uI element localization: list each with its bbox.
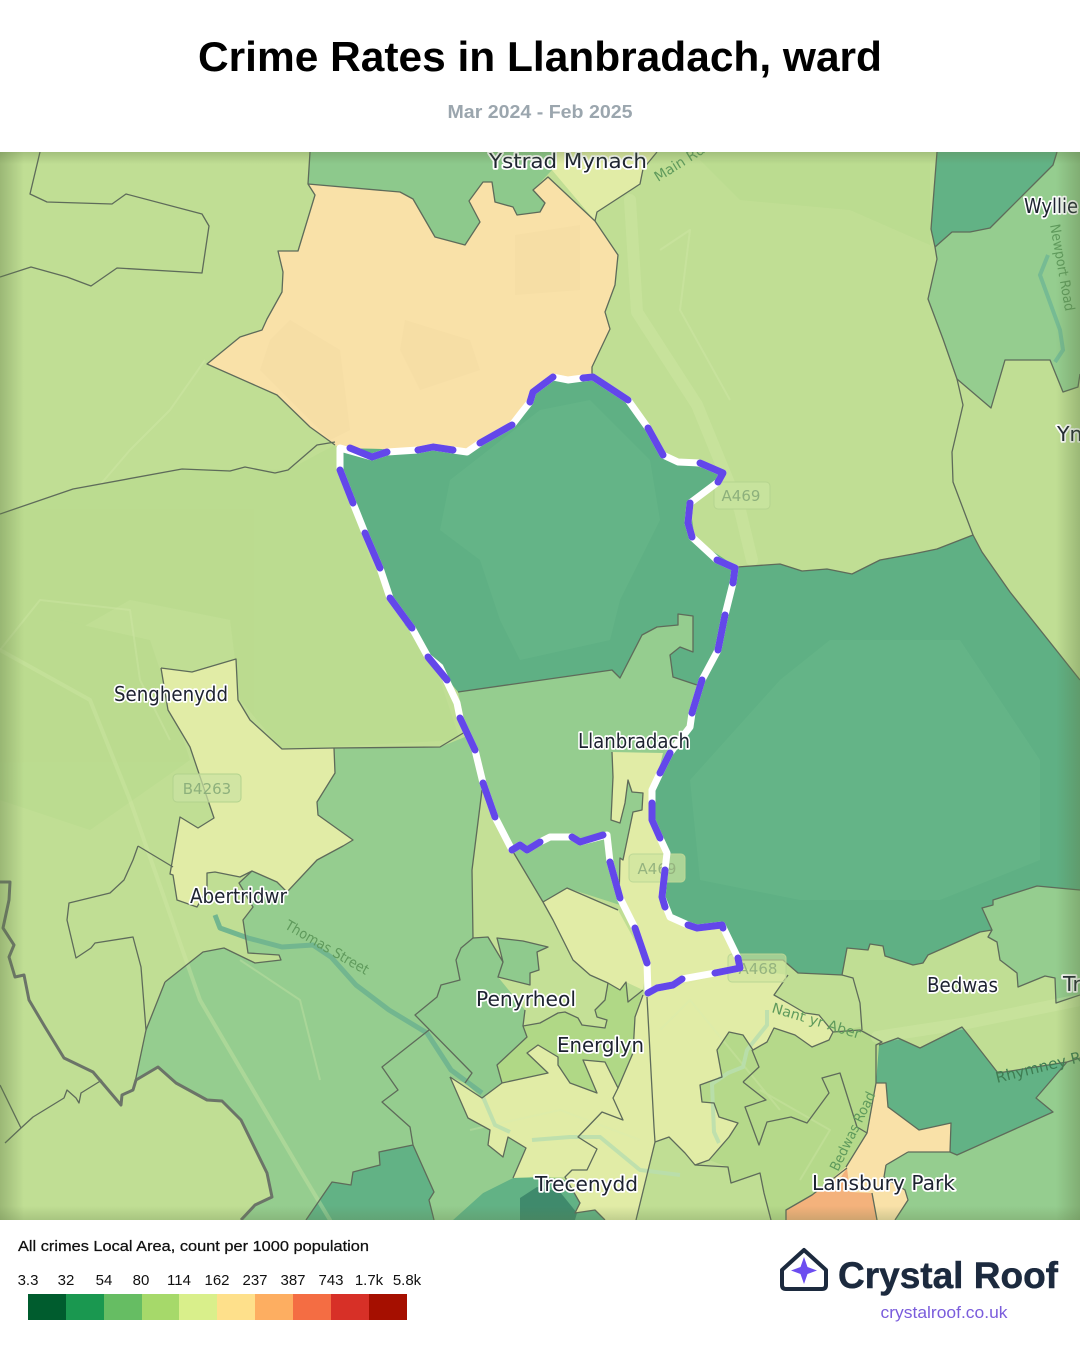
area: beige shading bbox=[260, 225, 580, 440]
place labels bbox=[114, 149, 1080, 1196]
street label: Rhymney River: Rhymney R bbox=[994, 1048, 1080, 1087]
street label: Thomas Street: Thomas Street bbox=[281, 917, 372, 979]
logo wordmark: Crystal Roof bbox=[838, 1255, 1059, 1296]
legend scale values: 162 bbox=[204, 1272, 230, 1289]
legend colour swatches bbox=[28, 1294, 407, 1320]
legend scale values: 32 bbox=[58, 1272, 74, 1289]
map base: light green areas bbox=[0, 152, 1080, 1220]
place labels: Trecenydd bbox=[534, 1172, 638, 1196]
area: Penyrheol upper patch bbox=[497, 938, 548, 985]
area: dark green Bedwas south bbox=[876, 1027, 1067, 1155]
road label: A468 bbox=[728, 954, 786, 982]
legend scale values bbox=[18, 1272, 422, 1289]
road label: B4263 bbox=[173, 774, 241, 802]
street label: Main Road: Main Rd bbox=[652, 142, 708, 185]
river: Trecenydd stream bbox=[483, 1010, 767, 1175]
legend bbox=[18, 1239, 422, 1320]
place labels: Penyrheol bbox=[476, 987, 576, 1011]
road label: A469 south bbox=[629, 854, 685, 882]
place labels: Bedwas bbox=[927, 973, 998, 997]
place labels: Lansbury Park bbox=[812, 1171, 955, 1195]
area: medium green south of river bbox=[382, 1030, 526, 1220]
area: medium green east patch bbox=[982, 886, 1080, 1003]
area: south medium green ward bbox=[512, 835, 620, 905]
area: eastern dark green ward bbox=[652, 535, 1080, 975]
ward boundary lines bbox=[0, 152, 1080, 1220]
legend scale values: 80 bbox=[133, 1272, 149, 1289]
title: Crime Rates in Llanbradach, ward bbox=[198, 33, 882, 80]
area: pale Ystrad Mynach bbox=[552, 152, 657, 221]
legend scale values: 3.3 bbox=[18, 1272, 38, 1289]
choropleth map bbox=[0, 142, 1080, 1220]
place labels: Llanbradach bbox=[578, 729, 690, 753]
legend scale values: 743 bbox=[318, 1272, 344, 1289]
area: terrain shading bbox=[0, 160, 930, 830]
area: Penyrheol medium green bbox=[415, 937, 527, 1098]
area: light green Van district bbox=[700, 1027, 879, 1220]
icon: house with star bbox=[782, 1250, 826, 1289]
area: bottom right medium green bbox=[884, 1058, 1080, 1220]
legend scale values: 114 bbox=[167, 1272, 191, 1289]
area: dark green Trecenydd south bbox=[453, 1177, 605, 1220]
area: north-east medium green ward bbox=[928, 152, 1080, 408]
area: pale yellow Senghenydd bbox=[161, 659, 353, 907]
ward outline: Llanbradach bbox=[340, 377, 740, 993]
dashes over outline bbox=[340, 377, 740, 993]
legend scale values: 237 bbox=[242, 1272, 268, 1289]
roads and streets bbox=[0, 484, 1080, 1220]
legend title: All crimes Local Area, count per 1000 population bbox=[18, 1239, 369, 1255]
legend scale values: 387 bbox=[280, 1272, 306, 1289]
area: central ward medium green bbox=[458, 614, 697, 905]
place labels: Abertridwr bbox=[190, 884, 288, 908]
website link: crystalroof.co.uk bbox=[880, 1304, 1008, 1322]
area: orange Lansbury Park bbox=[786, 1168, 877, 1220]
logo: Crystal Roof bbox=[782, 1250, 1059, 1322]
area: Llanbradach ward dark green upper bbox=[340, 376, 737, 692]
street label: Bedwas Road: Bedwas Road bbox=[827, 1089, 879, 1174]
road label: A469 north bbox=[714, 482, 770, 509]
area: beige northern ward bbox=[207, 177, 618, 452]
legend scale values: 1.7k bbox=[355, 1272, 384, 1289]
place labels: Ystrad Mynach bbox=[488, 149, 647, 173]
road label: A469 south: A469 bbox=[638, 860, 676, 878]
county boundary bbox=[0, 882, 272, 1220]
area: north-east dark green ward bbox=[931, 152, 1057, 247]
area: medium green ward west bbox=[134, 735, 482, 1220]
area: Energlyn light green bbox=[497, 982, 643, 1093]
area: pale yellow south Caerphilly bbox=[647, 968, 833, 1165]
area: pale yellow Trecenydd bbox=[450, 995, 655, 1220]
river: Thomas Street stream bbox=[215, 915, 482, 1093]
street label: Newport Road: Newport Road bbox=[1046, 223, 1077, 312]
map edge vignette bbox=[0, 152, 1080, 1220]
area: pale yellow south-west of ward bbox=[543, 888, 647, 990]
area: beige Lansbury Park bbox=[832, 1084, 950, 1220]
road label: B4263: B4263 bbox=[183, 780, 231, 798]
place labels: Energlyn bbox=[557, 1033, 644, 1057]
area: pale yellow ward core bbox=[611, 752, 740, 995]
street label: Nant yr Aber: Nant yr Aber bbox=[770, 1001, 863, 1043]
road label: A468: A468 bbox=[739, 960, 777, 978]
area: darkest ward bbox=[520, 1187, 577, 1220]
road label: A469 north: A469 bbox=[722, 487, 760, 505]
subtitle: date range: Mar 2024 - Feb 2025 bbox=[448, 101, 632, 122]
area: light green wedge bbox=[472, 790, 608, 1028]
area: darker green southern ward bbox=[306, 1145, 434, 1220]
river: Newport Road stream bbox=[1040, 255, 1063, 362]
place labels: Senghenydd bbox=[114, 682, 228, 706]
legend scale values: 5.8k bbox=[393, 1272, 422, 1289]
legend scale values: 54 bbox=[96, 1272, 112, 1289]
area: top green ward bbox=[308, 152, 552, 245]
